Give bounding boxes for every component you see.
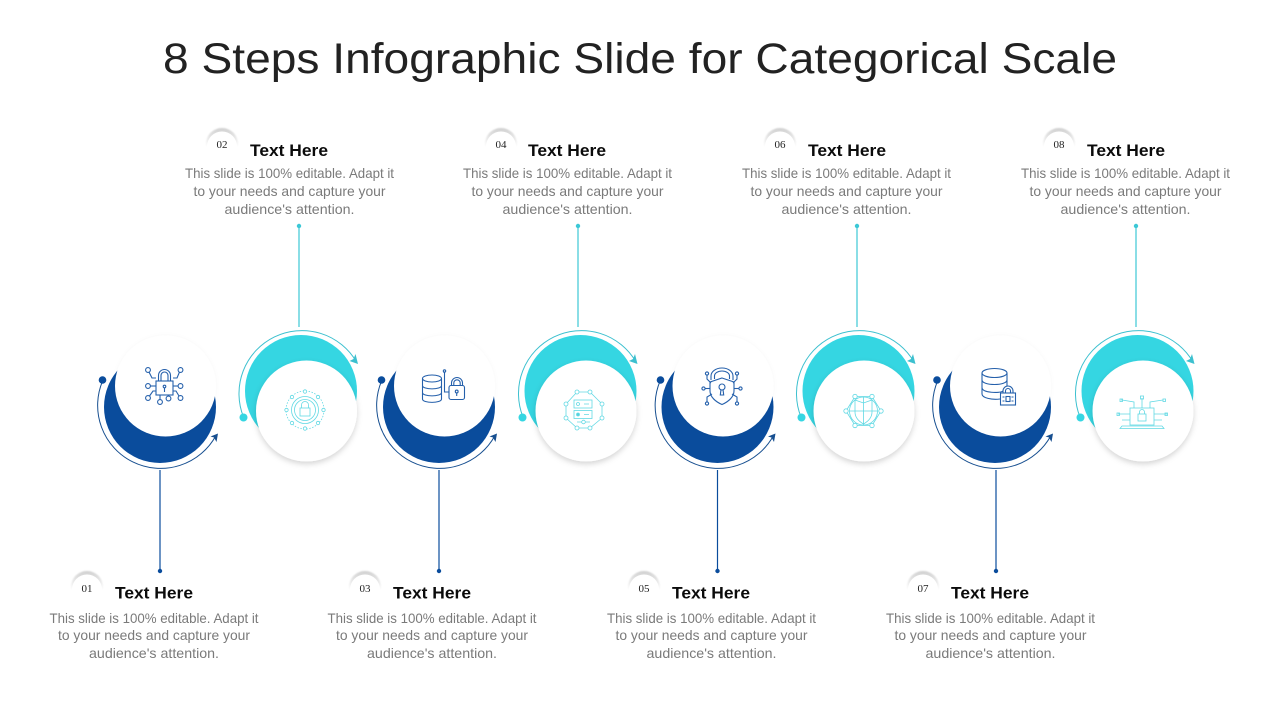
icon: shield padlock circuit [702, 368, 742, 405]
icon: laptop with padlock circuit [1117, 396, 1168, 428]
number badge 07: 07 [918, 583, 929, 595]
number badge 07 [907, 571, 939, 604]
step 05 text block: audience's attention. [646, 645, 776, 661]
step 05 text block: This slide is 100% editable. Adapt it [607, 610, 816, 626]
step 06 text block [742, 128, 951, 217]
number badge 03: 03 [360, 583, 371, 595]
number badge 06 [764, 128, 796, 162]
step 01 text block [50, 571, 259, 661]
connector line: step 4 [576, 224, 580, 327]
number badge 01: 01 [82, 583, 92, 595]
icon: padlock in concentric rings [285, 390, 325, 430]
number badge 08: 08 [1054, 139, 1065, 151]
step 07 text block: audience's attention. [926, 645, 1056, 661]
step 01 text block: Text Here [115, 584, 193, 602]
step 01 text block: This slide is 100% editable. Adapt it [50, 610, 259, 626]
step 06 text block: audience's attention. [782, 201, 912, 217]
number badge 06: 06 [774, 139, 786, 151]
step 06 text block: to your needs and capture your [750, 183, 943, 199]
step 04 text block: to your needs and capture your [472, 183, 664, 199]
step 8 crescent with icon [1075, 331, 1194, 462]
connector line: step 5 [715, 470, 720, 573]
step 3 crescent with icon [377, 336, 497, 468]
step 4 crescent with icon [518, 331, 638, 462]
number badge 03 [349, 571, 381, 604]
step 05 text block [607, 571, 816, 661]
connector line: step 3 [437, 470, 441, 573]
step 2 crescent with icon [239, 331, 358, 462]
step 6 crescent with icon [796, 331, 916, 462]
step 01 text block: to your needs and capture your [58, 627, 250, 643]
number badge 05: 05 [638, 583, 650, 595]
step 02 text block: audience's attention. [224, 201, 354, 217]
step 02 text block: to your needs and capture your [194, 183, 386, 199]
step 02 text block: This slide is 100% editable. Adapt it [185, 165, 394, 181]
connector line: step 2 [297, 224, 301, 327]
step 08 text block: to your needs and capture your [1030, 183, 1222, 199]
step 1 crescent with icon [98, 336, 218, 468]
connector line: step 1 [158, 470, 162, 573]
step 02 text block [185, 128, 394, 217]
step 05 text block: Text Here [672, 584, 750, 602]
step 07 text block: to your needs and capture your [894, 627, 1087, 643]
step 06 text block: Text Here [808, 142, 886, 160]
number badge 02 [206, 128, 238, 162]
step 08 text block [1021, 128, 1230, 217]
icon: server in node ring [564, 390, 604, 430]
step 03 text block: This slide is 100% editable. Adapt it [328, 610, 537, 626]
step 7 crescent with icon [933, 336, 1053, 468]
step 04 text block [463, 128, 672, 217]
step 04 text block: This slide is 100% editable. Adapt it [463, 165, 672, 181]
number badge 08 [1043, 128, 1075, 162]
number badge 04 [485, 128, 517, 162]
connector line: step 7 [994, 470, 998, 573]
step 07 text block: This slide is 100% editable. Adapt it [886, 610, 1095, 626]
step 07 text block [886, 571, 1095, 661]
step 03 text block: Text Here [393, 584, 471, 602]
number badge 04: 04 [496, 139, 507, 151]
title: 8 Steps Infographic Slide for Categorical Scale [163, 35, 1117, 83]
number badge 02: 02 [216, 139, 228, 151]
connector line: step 6 [855, 224, 859, 327]
step 03 text block: to your needs and capture your [336, 627, 528, 643]
number badge 01 [71, 571, 103, 604]
step 03 text block [328, 571, 537, 661]
step 03 text block: audience's attention. [367, 645, 497, 661]
step 02 text block: Text Here [250, 142, 328, 160]
icon: database and padlock [422, 370, 464, 402]
step 04 text block: audience's attention. [502, 201, 632, 217]
step 07 text block: Text Here [951, 584, 1029, 602]
step 05 text block: to your needs and capture your [616, 627, 808, 643]
step 01 text block: audience's attention. [89, 645, 219, 661]
icon: database with padlock [982, 368, 1016, 405]
step 06 text block: This slide is 100% editable. Adapt it [742, 165, 951, 181]
icon: circuit padlock [146, 368, 183, 404]
step 04 text block: Text Here [528, 142, 606, 160]
step 08 text block: This slide is 100% editable. Adapt it [1021, 165, 1230, 181]
step 5 crescent with icon [655, 336, 776, 468]
icon: globe shield network [844, 394, 883, 428]
step 08 text block: audience's attention. [1060, 201, 1190, 217]
step 08 text block: Text Here [1087, 142, 1165, 160]
number badge 05 [628, 571, 660, 604]
connector line: step 8 [1134, 224, 1138, 327]
